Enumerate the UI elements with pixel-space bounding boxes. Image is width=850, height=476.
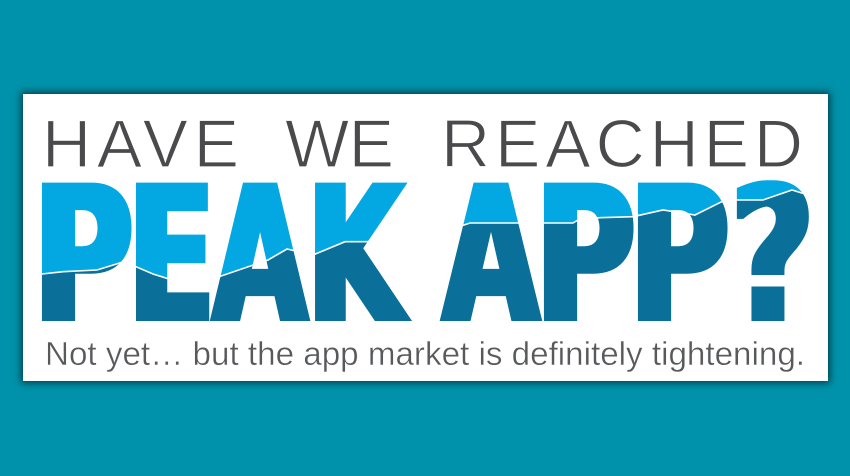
headline: peak app?: P [629, 147, 729, 365]
headline: peak app?: A [213, 148, 307, 365]
headline: peak app?: P [535, 147, 635, 365]
headline: peak app? [30, 147, 825, 365]
headline: peak app?: K [307, 148, 408, 365]
headline: peak app?: E [128, 147, 215, 364]
headline: peak app?: P [33, 147, 133, 365]
heading: have we reached [42, 106, 803, 182]
panel: white banner [23, 94, 828, 381]
water-level colour field behind headline [30, 175, 825, 330]
heading: have we reached: WE [285, 106, 394, 182]
subtitle: Not yet… but the app market is definitely tightening. [45, 335, 805, 372]
heading: have we reached: HAVE [42, 106, 239, 182]
heading: have we reached: REACHED [441, 106, 803, 182]
headline: peak app?: A [443, 148, 539, 365]
headline: peak app?: ? [731, 148, 814, 365]
